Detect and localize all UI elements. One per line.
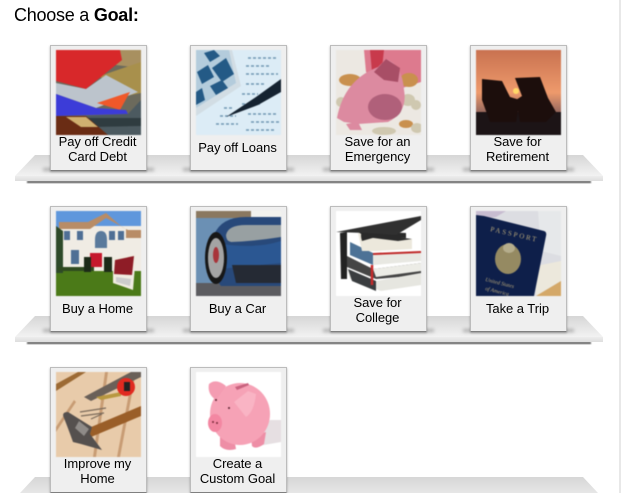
icon: hammer and tools [55,371,142,458]
label: Custom Goal [200,471,275,486]
icon: blue car [195,210,282,297]
icon: passport [475,210,562,297]
label: Card Debt [68,149,127,164]
label: Home [80,471,115,486]
label: College [356,310,399,325]
label [59,134,136,164]
icon: graduation cap and books [336,211,422,296]
label: Emergency [345,149,410,164]
icon: passport: United States [485,277,515,290]
label: Save for an [345,134,410,149]
icon: sunset beach chairs [475,49,562,136]
icon: broken piggy bank [336,49,422,136]
label: Pay off Credit [59,134,136,149]
label: Buy a Home [62,301,133,316]
label: Pay off Loans [198,140,277,155]
card: college [330,206,427,332]
card: custom goal [190,367,287,493]
title: Choose a Goal: [14,5,139,25]
label: Take a Trip [486,301,549,316]
shelf 2 [15,316,603,345]
label [200,456,275,486]
icon: house for sale [55,210,142,297]
label: Save for [353,295,402,310]
card: retirement [470,45,567,171]
label [64,456,132,486]
card: car [190,206,287,332]
card: emergency [330,45,427,171]
card: improve home [50,367,147,493]
label [486,134,549,164]
card: trip [470,206,567,332]
icon: passport: PASSPORT [490,225,538,244]
label: Create a [213,456,262,471]
label: Buy a Car [209,301,266,316]
card: credit card debt [50,45,147,171]
label: Improve my [64,456,131,471]
icon: credit cards [55,49,142,136]
label [353,295,402,325]
scrollbar edge [619,0,621,493]
card: home [50,206,147,332]
icon: pink piggy bank [196,372,281,457]
icon: calculator and pen [195,49,282,135]
shelf 1 [15,155,603,184]
shelf 3 [20,477,598,493]
label [345,134,410,164]
card: loans [190,45,287,171]
label: Save for [493,134,542,149]
label: Retirement [486,149,549,164]
